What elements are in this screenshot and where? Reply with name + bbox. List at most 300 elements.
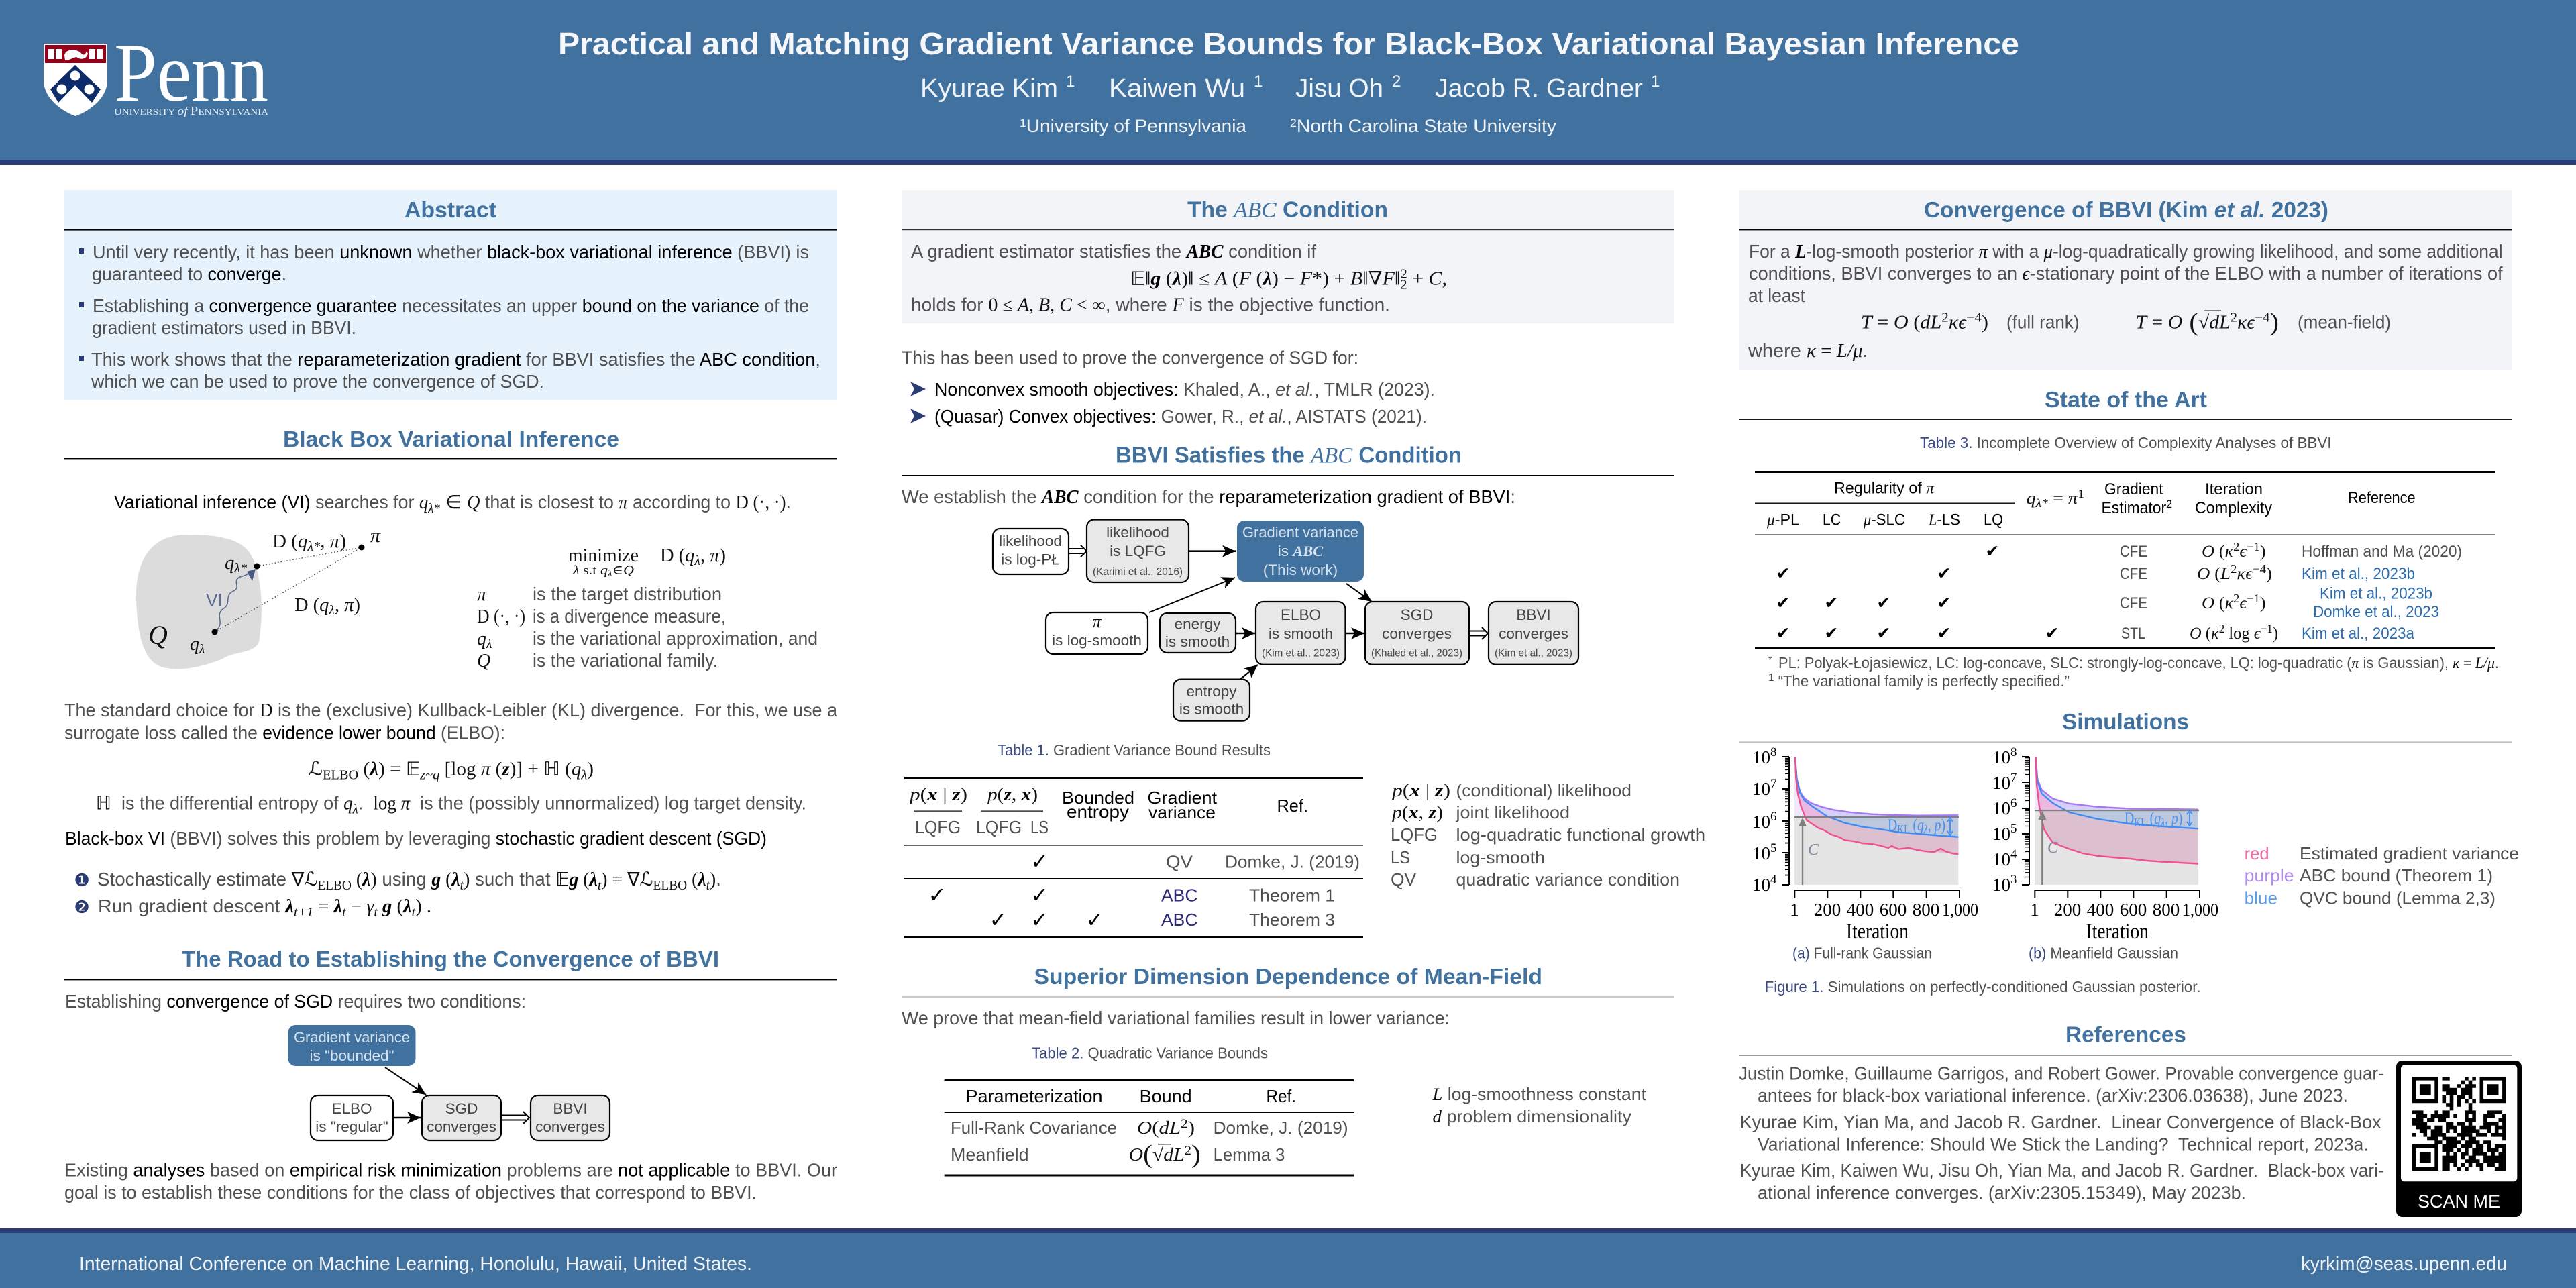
panel: state of the art <box>1739 387 2512 690</box>
flow diagram: road <box>288 1025 610 1140</box>
table 3: complexity analyses: μ-PL <box>1766 511 1799 529</box>
convergence statement: at least <box>1748 285 1805 306</box>
affiliations: 1 <box>1020 117 1026 129</box>
table 1: gradient variance bound results: Gradient <box>1147 788 1218 808</box>
affiliations: North Carolina State University <box>1297 116 1557 136</box>
chart: full-rank Gaussian: 10 <box>1752 747 1770 767</box>
table 3: complexity analyses: κϵ <box>2237 565 2253 583</box>
chart: meanfield Gaussian: 10 <box>1992 747 2010 767</box>
abstract bullets: guaranteed to converge. <box>92 264 286 284</box>
table 3: complexity analyses: Iteration <box>2205 480 2263 498</box>
chart: full-rank Gaussian: 7 <box>1770 777 1776 791</box>
convergence statement: where κ = L/μ. <box>1748 340 1868 362</box>
ELBO explanation: λ) = 𝔼 <box>370 758 419 780</box>
table 1: gradient variance bound results: ✓ <box>1030 849 1049 874</box>
diagram: variational family blob: D (q <box>294 595 329 616</box>
table 3: complexity analyses: Kim et al., 2023b <box>2320 585 2432 603</box>
table 3: complexity analyses: ✔ <box>1877 623 1890 643</box>
table 1 legend: (conditional) likelihood <box>1456 780 1631 800</box>
objective formula <box>568 545 726 578</box>
flow diagram: proof structure <box>993 519 1578 721</box>
chart: meanfield Gaussian: 10 <box>1992 824 2010 844</box>
table 2: quadratic variance bounds: ) <box>1191 1140 1201 1169</box>
chart: meanfield Gaussian: Iteration <box>2086 920 2149 944</box>
convergence statement: T = O <box>2136 313 2182 333</box>
panel: superior dimension dependence <box>902 964 1674 1177</box>
diagram: variational family blob: π) <box>344 595 360 616</box>
header banner <box>0 0 2576 165</box>
chart: meanfield Gaussian: C <box>2047 839 2059 857</box>
table 3: complexity analyses: 1 <box>2078 487 2084 500</box>
SGD steps: λ) using g (λ <box>362 869 460 890</box>
ELBO explanation: Black-box VI (BBVI) solves this problem by leveraging stochastic gradient descent (SGD) <box>65 828 767 849</box>
heading: black box variational inference: Black Box Variational Inference <box>283 427 619 451</box>
reference list: antees for black-box variational inference. (arXiv:2306.03638), June 2023. <box>1758 1085 2348 1106</box>
convergence statement: κϵ <box>1949 313 1968 333</box>
table 1: gradient variance bound results: Bounded <box>1062 788 1134 808</box>
table 2 legend: L log-smoothness constant <box>1432 1084 1647 1104</box>
flow diagram: proof structure: is ABC <box>1278 543 1324 559</box>
flow diagram: proof structure: converges <box>1382 625 1452 642</box>
heading: BBVI satisfies ABC: BBVI Satisfies the ABC Condition <box>1116 443 1462 468</box>
table 1: gradient variance bound results: QV <box>1166 852 1193 872</box>
objective formula: Q <box>623 564 634 578</box>
convergence statement: conditions, BBVI converges to an ϵ-stationary point of the ELBO with a number of iterations of <box>1749 263 2503 284</box>
table 1 legend <box>1391 780 1705 890</box>
table 3: complexity analyses: Estimator <box>2101 499 2169 517</box>
chart: full-rank Gaussian: 10 <box>1752 779 1770 799</box>
SGD steps: t <box>342 906 346 920</box>
table 2: quadratic variance bounds: O <box>1129 1144 1143 1165</box>
abstract bullets: gradient estimators used in BBVI. <box>92 317 356 338</box>
symbol definitions: π <box>477 584 487 605</box>
reference list: Kyurae Kim, Kaiwen Wu, Jisu Oh, Yian Ma, and Jacob R. Gardner. Black-box vari- <box>1740 1160 2384 1181</box>
objective formula: λ <box>694 554 700 568</box>
SGD steps: g <box>378 896 392 917</box>
diagram: variational family blob <box>136 525 381 669</box>
convergence statement: √ <box>2198 313 2210 333</box>
chart: full-rank Gaussian: 10 <box>1752 812 1770 832</box>
table 1 legend: log-smooth <box>1456 847 1545 867</box>
convergence statement: ) <box>2270 309 2279 337</box>
table 3 footnotes: 1 <box>1768 672 1774 684</box>
table 3: complexity analyses: Kim et al., 2023a <box>2302 625 2415 643</box>
table 1: gradient variance bound results: Theorem 3 <box>1249 910 1335 930</box>
chart: full-rank Gaussian: q <box>1917 816 1924 835</box>
table 1: gradient variance bound results: LS <box>1030 817 1049 837</box>
flow diagram: proof structure: ELBO <box>1281 606 1321 623</box>
flow diagram: proof structure: Gradient variance <box>1242 524 1358 541</box>
flow diagram: proof structure: is smooth <box>1165 633 1230 650</box>
SGD steps: t <box>412 906 416 920</box>
diagram: variational family blob: , <box>335 595 344 616</box>
table 1 legend: joint likelihood <box>1455 802 1570 822</box>
flow diagram: proof structure: (This work) <box>1263 561 1338 578</box>
diagram: variational family blob: D (q <box>272 531 307 552</box>
reference list: Variational Inference: Should We Stick the Landing? Technical report, 2023a. <box>1758 1134 2369 1155</box>
chart: meanfield Gaussian: 10 <box>1992 875 2010 895</box>
table 3: complexity analyses: O (κ <box>2202 543 2233 561</box>
ABC definition: holds for 0 ≤ A, B, C < ∞, where F is the objective function. <box>911 294 1390 315</box>
heading: superior dimension dependence: Superior Dimension Dependence of Mean-Field <box>1034 964 1542 989</box>
QR code: scan me: SCAN ME <box>2418 1191 2500 1212</box>
table 3 footnotes <box>1768 654 2499 690</box>
chart legend: QVC bound (Lemma 2,3) <box>2300 888 2496 908</box>
authors: 1 <box>1066 72 1075 91</box>
flow diagram: road: BBVI <box>553 1100 588 1117</box>
table 3: complexity analyses: ) <box>2260 543 2266 561</box>
chart: full-rank Gaussian: 800 <box>1913 900 1939 920</box>
table 1: gradient variance bound results: entropy <box>1067 802 1129 822</box>
flow diagram: proof structure: likelihood <box>999 533 1062 549</box>
convergence statement: For a L-log-smooth posterior π with a μ-log-quadratically growing likelihood, and some additional <box>1749 241 2503 262</box>
table 3: complexity analyses: −4 <box>2253 562 2266 576</box>
table 3: complexity analyses: −1 <box>2261 622 2273 635</box>
figure 1 caption: Figure 1. Simulations on perfectly-conditioned Gaussian posterior. <box>1765 978 2201 996</box>
table 3: complexity analyses: ) <box>2266 565 2272 583</box>
chart: full-rank Gaussian: 10 <box>1752 843 1770 863</box>
table 3: complexity analyses: π <box>2068 490 2079 508</box>
chart: meanfield Gaussian: q <box>2154 810 2161 828</box>
table 3: complexity analyses: 2 <box>2233 592 2239 605</box>
heading: road to convergence: The Road to Establishing the Convergence of BBVI <box>182 947 719 971</box>
table 3: complexity analyses: log <box>2224 625 2254 643</box>
chart legend: ABC bound (Theorem 1) <box>2300 865 2493 885</box>
chart: meanfield Gaussian: ( <box>2147 810 2154 828</box>
table 3: complexity analyses: O (κ <box>2190 625 2219 643</box>
QR code: scan me <box>2396 1061 2522 1217</box>
table 2: quadratic variance bounds: Bound <box>1140 1086 1192 1106</box>
table 3: complexity analyses: q <box>2027 490 2036 508</box>
SGD convergence uses: (Quasar) Convex objectives: Gower, R., et al., AISTATS (2021). <box>934 406 1427 427</box>
convergence statement <box>1748 241 2503 362</box>
diagram: variational family blob: λ <box>328 604 335 618</box>
table 2: quadratic variance bounds: Domke, J. (2019) <box>1214 1118 1348 1138</box>
diagram: variational family blob: λ <box>199 643 205 657</box>
convergence statement: κϵ <box>2237 313 2256 333</box>
road conclusion: Existing analyses based on empirical risk minimization problems are not applicable to BBVI. Our <box>64 1159 837 1181</box>
table 3: complexity analyses: ϵ <box>2254 625 2261 643</box>
chart legend: Estimated gradient variance <box>2300 843 2519 863</box>
table 3: complexity analyses: 2 <box>2219 622 2224 635</box>
chart: full-rank Gaussian: λ <box>1923 822 1928 836</box>
chart: full-rank Gaussian: 6 <box>1770 810 1776 824</box>
chart: meanfield Gaussian: 200 <box>2054 900 2081 920</box>
chart: meanfield Gaussian: 4 <box>2010 847 2017 861</box>
flow diagram: proof structure: π <box>1092 612 1102 631</box>
table 1: gradient variance bound results: ✓ <box>1030 882 1049 908</box>
flow diagram: proof structure: SGD <box>1401 606 1433 623</box>
SGD convergence uses: This has been used to prove the convergence of SGD for: <box>902 347 1358 368</box>
ELBO explanation: ) <box>587 759 594 780</box>
table 3: complexity analyses: 2 <box>2231 562 2237 576</box>
table 3 footnotes: “The variational family is perfectly specified.” <box>1774 672 2070 690</box>
table 2: quadratic variance bounds: √ <box>1152 1144 1163 1165</box>
authors: Kaiwen Wu <box>1109 74 1245 103</box>
table 3: complexity analyses: ✔ <box>1776 593 1790 612</box>
SGD steps: λ <box>697 869 706 890</box>
SGD steps: − <box>346 896 366 917</box>
table 1 legend: quadratic variance condition <box>1456 869 1680 890</box>
SGD convergence uses: Nonconvex smooth objectives: Khaled, A., et al., TMLR (2023). <box>934 379 1435 400</box>
chart: meanfield Gaussian: KL <box>2134 816 2147 829</box>
table 1: gradient variance bound results: variance <box>1148 802 1216 822</box>
table 3: complexity analyses: = <box>2048 490 2068 508</box>
table 3: complexity analyses: ✔ <box>2045 623 2059 643</box>
SGD steps: t <box>598 879 602 893</box>
symbol definitions: λ <box>486 637 492 651</box>
diagram: variational family blob: VI <box>206 590 223 610</box>
chart: meanfield Gaussian: λ <box>2160 816 2165 829</box>
SGD steps: ELBO <box>653 879 687 893</box>
affiliations: 2 <box>1290 117 1297 129</box>
table 2: quadratic variance bounds: Lemma 3 <box>1214 1144 1285 1165</box>
chart: meanfield Gaussian: 7 <box>2010 771 2017 785</box>
flow diagram: proof structure: is smooth <box>1179 701 1244 718</box>
table 1: gradient variance bound results: LQFG <box>976 817 1022 837</box>
ELBO explanation: ℍ is the differential entropy of q <box>96 792 353 814</box>
ABC definition: 2 <box>1400 278 1407 292</box>
table 2: quadratic variance bounds: Ref. <box>1267 1086 1296 1106</box>
footer: email: kyrkim@seas.upenn.edu <box>2301 1253 2507 1274</box>
SGD steps: ) . <box>415 896 431 917</box>
flow diagram: road: converges <box>427 1118 496 1135</box>
table 1: gradient variance bound results: ✓ <box>989 907 1007 932</box>
authors <box>920 72 1660 103</box>
abstract bullets: which we can be used to prove the convergence of SGD. <box>91 371 544 392</box>
table 3: complexity analyses: ✔ <box>1937 593 1951 612</box>
convergence statement: −4 <box>1966 311 1982 325</box>
logo: University of Pennsylvania: UNIVERSITY of PENNSYLVANIA <box>114 104 269 117</box>
panel: ABC condition <box>902 190 1674 323</box>
objective formula: minimize <box>568 545 639 566</box>
flow diagram: proof structure: (Kim et al., 2023) <box>1495 648 1572 659</box>
chart: full-rank Gaussian: 10 <box>1752 875 1770 895</box>
chart: meanfield Gaussian: , <box>2165 810 2171 828</box>
ABC definition: 𝔼‖g (λ)‖ ≤ A (F (λ) − F*) + B‖∇F‖ <box>1130 268 1400 290</box>
flow diagram: road: is "regular" <box>315 1118 388 1135</box>
table 3: complexity analyses: LQ <box>1984 511 2003 529</box>
table 3: complexity analyses: ) <box>2273 625 2278 643</box>
table 3: complexity analyses: ✔ <box>1825 593 1838 612</box>
table 2: quadratic variance bounds: 2 <box>1181 1117 1188 1131</box>
mean-field statement: We prove that mean-field variational families result in lower variance: <box>902 1008 1450 1028</box>
ABC definition <box>911 241 1447 315</box>
table 2: quadratic variance bounds: O(dL <box>1137 1118 1178 1138</box>
chart: meanfield Gaussian: p) <box>2171 810 2184 828</box>
table 3: complexity analyses: Regularity of π <box>1834 479 1935 498</box>
flow diagram: proof structure: (Kim et al., 2023) <box>1262 648 1340 659</box>
table 1: gradient variance bound results: Ref. <box>1277 796 1308 816</box>
table 3: complexity analyses: −1 <box>2247 592 2260 605</box>
affiliations <box>1020 116 1557 136</box>
table 3: complexity analyses: ✔ <box>1937 564 1951 583</box>
table 1: gradient variance bound results: ✓ <box>1030 907 1049 932</box>
reference list: ational inference converges. (arXiv:2305.15349), May 2023b. <box>1758 1182 2246 1203</box>
logo: University of Pennsylvania <box>44 27 269 119</box>
SGD steps: Stochastically estimate ∇ℒ <box>97 868 318 890</box>
table 3: complexity analyses: −1 <box>2247 540 2260 553</box>
table 3: complexity analyses: STL <box>2121 625 2145 643</box>
table 3: complexity analyses: λ* <box>2035 496 2048 510</box>
table 1 legend: p(x, z) <box>1391 802 1443 822</box>
chart: full-rank Gaussian: 600 <box>1880 900 1907 920</box>
table 3: complexity analyses: ϵ <box>2239 594 2247 612</box>
symbol definitions: D (·, ·) <box>477 606 525 627</box>
SGD steps: ( <box>352 869 362 890</box>
convergence statement: 2 <box>1941 311 1949 325</box>
SGD steps: ) <box>464 869 470 890</box>
panel: abstract <box>64 190 837 400</box>
table 3: complexity analyses: L-LS <box>1928 511 1960 529</box>
flow diagram: road: converges <box>535 1118 605 1135</box>
authors: 1 <box>1651 72 1660 91</box>
table 3: complexity analyses: Hoffman and Ma (2020) <box>2302 543 2462 561</box>
objective formula: ∈ <box>612 564 623 578</box>
convergence statement: T = O (dL <box>1861 313 1940 333</box>
symbol definitions: Q <box>477 651 490 672</box>
table 2: quadratic variance bounds: Parameterization <box>966 1086 1103 1106</box>
table 3: complexity analyses: ✔ <box>1776 564 1790 583</box>
panel: road to convergence <box>64 947 837 1203</box>
table 1: gradient variance bound results: Theorem 1 <box>1249 885 1335 906</box>
heading: convergence of BBVI: Convergence of BBVI (Kim et al. 2023) <box>1924 197 2328 222</box>
table 1 legend: QV <box>1391 869 1417 890</box>
diagram: variational family blob: , <box>320 531 330 552</box>
affiliations: University of Pennsylvania <box>1026 116 1247 136</box>
SGD steps: t <box>706 879 710 893</box>
chart: meanfield Gaussian <box>1992 745 2218 962</box>
SGD steps: ( <box>687 869 698 890</box>
heading: abstract: Abstract <box>405 197 496 222</box>
table 2: quadratic variance bounds <box>945 1079 1354 1177</box>
chart: full-rank Gaussian: 1,000 <box>1942 900 1978 920</box>
convergence statement: ( <box>2182 309 2198 337</box>
abstract bullets <box>79 241 820 392</box>
SGD steps: t+1 <box>294 906 313 920</box>
SGD steps: = <box>313 896 333 917</box>
table 3: complexity analyses: 2 <box>2166 498 2172 511</box>
chart: meanfield Gaussian: 1,000 <box>2182 900 2218 920</box>
table 3: complexity analyses: ✔ <box>1877 593 1890 612</box>
convergence statement: 2 <box>2231 311 2237 325</box>
convergence statement: dL <box>2209 313 2231 333</box>
table 3: complexity analyses: LC <box>1823 511 1841 529</box>
table 2: quadratic variance bounds: ) <box>1188 1118 1195 1138</box>
symbol definitions: is a divergence measure, <box>533 606 726 627</box>
footer banner <box>0 1228 2576 1288</box>
objective formula: π) <box>710 545 726 566</box>
heading: references: References <box>2065 1022 2186 1046</box>
table 2: quadratic variance bounds: ( <box>1143 1140 1152 1169</box>
chart: meanfield Gaussian: 10 <box>1992 798 2010 818</box>
chart: meanfield Gaussian: 8 <box>2010 745 2017 759</box>
ELBO explanation: λ <box>580 769 587 782</box>
flow diagram: proof structure: converges <box>1499 625 1568 642</box>
table 1 caption: Table 1. Gradient Variance Bound Results <box>998 741 1271 759</box>
road conclusion: goal is to establish these conditions for the class of objectives that correspond to BBVI. <box>64 1182 757 1203</box>
SGD steps: (λ <box>396 896 411 917</box>
SGD steps: ELBO <box>317 879 352 893</box>
flow diagram: road: SGD <box>445 1100 478 1117</box>
table 2 legend: d problem dimensionality <box>1433 1106 1631 1126</box>
SGD steps: such that 𝔼g (λ <box>475 868 598 890</box>
table 2 caption: Table 2. Quadratic Variance Bounds <box>1032 1044 1268 1061</box>
table 2: quadratic variance bounds: Meanfield <box>951 1144 1029 1165</box>
table 1: gradient variance bound results <box>904 777 1363 938</box>
SGD steps: λ <box>333 896 342 917</box>
chart: meanfield Gaussian: 600 <box>2120 900 2147 920</box>
chart legend: purple <box>2245 865 2294 885</box>
ELBO explanation: λ <box>352 803 358 817</box>
symbol definitions: q <box>477 629 486 649</box>
table 1 legend: log-quadratic functional growth <box>1456 824 1705 845</box>
table 2: quadratic variance bounds: Full-Rank Covariance <box>951 1118 1117 1138</box>
intro sentence: Q that is closest to π according to D (·, ·). <box>467 492 791 513</box>
panel: simulations <box>1739 709 2519 996</box>
ABC definition: C, <box>1429 269 1447 290</box>
chart: meanfield Gaussian: 10 <box>1992 849 2010 869</box>
ELBO explanation: π (z)] + ℍ (q <box>481 758 581 780</box>
reference list: Kyurae Kim, Yian Ma, and Jacob R. Gardner. Linear Convergence of Black-Box <box>1740 1112 2381 1132</box>
convergence statement: −4 <box>2255 311 2270 325</box>
table 3: complexity analyses: Complexity <box>2195 499 2272 517</box>
SGD steps: ❷ <box>74 898 90 918</box>
ELBO explanation: [log <box>439 759 481 780</box>
authors: 2 <box>1392 72 1401 91</box>
flow diagram: proof structure: is smooth <box>1269 625 1333 642</box>
symbol definitions <box>477 584 818 672</box>
diagram: variational family blob: π) <box>330 531 346 552</box>
flow diagram: proof structure: is log-PŁ <box>1001 551 1060 568</box>
chart: full-rank Gaussian: KL <box>1897 822 1910 836</box>
SGD steps <box>74 868 721 920</box>
authors: Jisu Oh <box>1295 74 1383 103</box>
chart: full-rank Gaussian <box>1752 745 1978 962</box>
intro sentence: λ* <box>427 502 440 516</box>
chart: full-rank Gaussian: 8 <box>1770 745 1776 759</box>
abstract bullets: Until very recently, it has been unknown whether black-box variational inference (BBVI) is <box>93 241 809 262</box>
chart: meanfield Gaussian: (b) Meanfield Gaussian <box>2029 945 2178 962</box>
ABC definition: + <box>1407 269 1429 290</box>
table 1: gradient variance bound results: ABC <box>1161 910 1198 930</box>
table 1 legend: LS <box>1391 847 1410 867</box>
table 2 legend <box>1432 1084 1647 1126</box>
authors: Kyurae Kim <box>920 74 1058 103</box>
table 3: complexity analyses: 2 <box>2233 540 2239 553</box>
chart: full-rank Gaussian: 400 <box>1847 900 1874 920</box>
SGD convergence uses <box>902 347 1435 427</box>
table 2: quadratic variance bounds: 2 <box>1185 1144 1191 1158</box>
reference list <box>1739 1063 2384 1203</box>
diagram: variational family blob: q <box>225 553 234 574</box>
chart legend <box>2245 843 2519 908</box>
table 1: gradient variance bound results: Domke, J. (2019) <box>1225 852 1360 872</box>
SGD steps: . <box>716 869 721 890</box>
intro sentence: ∈ <box>440 491 467 513</box>
diagram: variational family blob: q <box>190 634 199 655</box>
ABC definition: 2 <box>1400 268 1407 282</box>
table 3: complexity analyses: ) <box>2260 594 2266 612</box>
heading: ABC condition: The ABC Condition <box>1187 197 1388 223</box>
objective formula: λ <box>607 568 612 578</box>
panel: black box variational inference <box>64 427 837 920</box>
table 3: complexity analyses: μ-SLC <box>1863 511 1905 529</box>
flow diagram: road: Gradient variance <box>294 1029 410 1046</box>
flow diagram: road: is "bounded" <box>309 1047 394 1064</box>
flow diagram: proof structure: entropy <box>1186 683 1237 700</box>
SGD steps: t <box>460 879 464 893</box>
